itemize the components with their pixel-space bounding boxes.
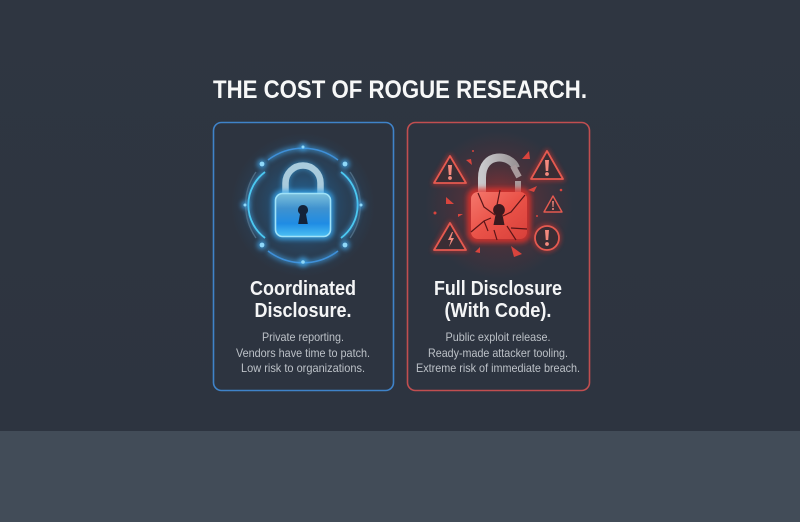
card heading: Full Disclosure: [434, 277, 562, 300]
card outline: blue: [214, 122, 394, 390]
keyhole: [493, 204, 505, 225]
card body text: Ready-made attacker tooling.: [428, 346, 568, 360]
broken shackle: [482, 158, 516, 193]
lock body: [467, 188, 531, 243]
icon: glowing intact padlock: [231, 133, 375, 277]
warning marks: [448, 160, 554, 247]
card outline: red: [408, 122, 590, 390]
card heading: Disclosure.: [254, 299, 352, 322]
cracks: [471, 190, 527, 240]
card body text: Low risk to organizations.: [241, 361, 365, 375]
card body text: Extreme risk of immediate breach.: [416, 361, 580, 375]
card heading: Coordinated: [250, 277, 356, 300]
debris shards: [434, 150, 562, 257]
card body text: Private reporting.: [262, 330, 344, 344]
lock body: [272, 190, 334, 240]
ring nodes: [241, 143, 365, 267]
panel: full disclosure: [408, 122, 590, 390]
warning triangles: [434, 151, 563, 250]
card heading: (With Code).: [444, 299, 552, 322]
card body text: Public exploit release.: [446, 330, 550, 344]
warning glows: [434, 151, 563, 250]
shackle: [286, 166, 320, 196]
icon: shattered padlock with warnings: [425, 131, 573, 279]
panel: coordinated disclosure: [214, 122, 394, 390]
title: THE COST OF ROGUE RESEARCH.: [213, 76, 587, 104]
card body text: Vendors have time to patch.: [236, 346, 370, 360]
keyhole: [298, 205, 308, 224]
bottom band: [0, 431, 800, 522]
